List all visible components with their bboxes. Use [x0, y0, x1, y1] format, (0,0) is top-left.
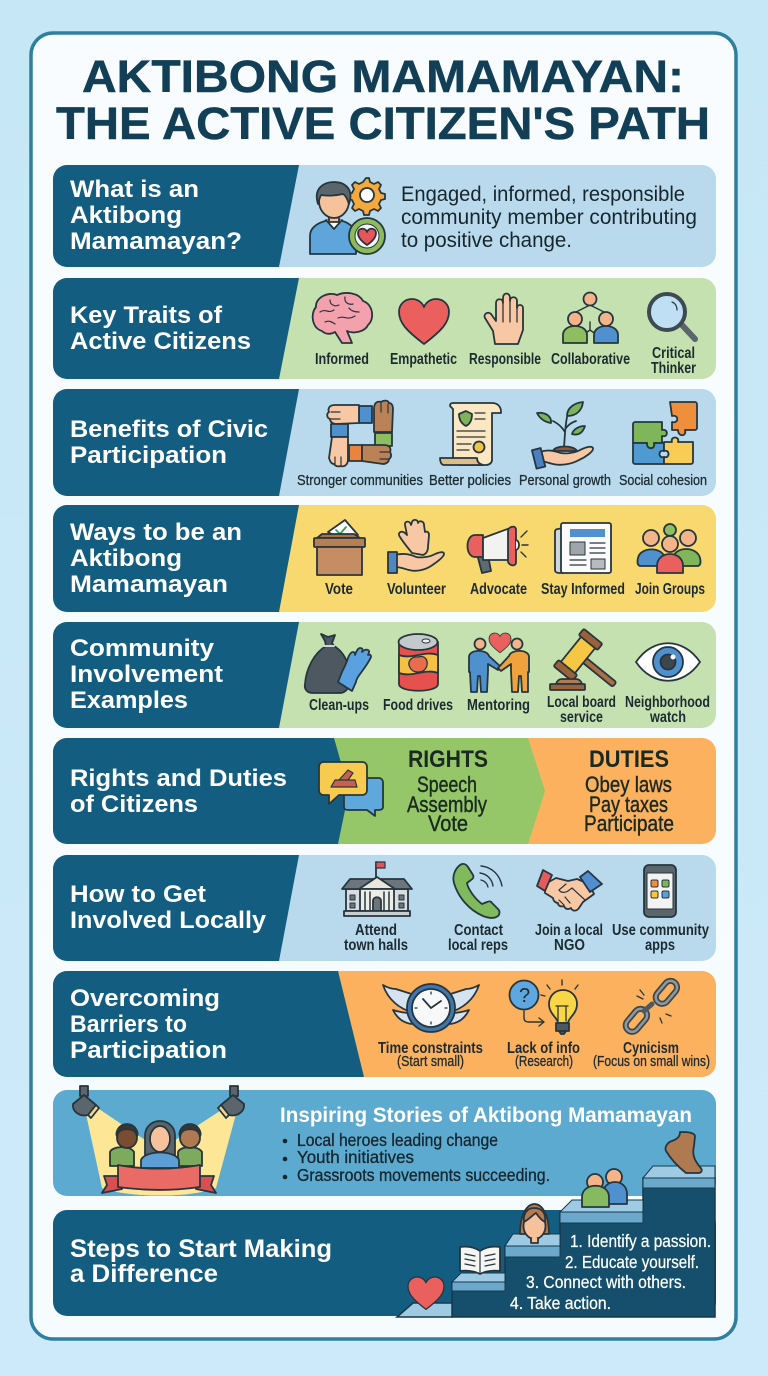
example labels: watch: [649, 709, 686, 726]
panel: overcoming barriers: [53, 971, 716, 1077]
panel: ways to be an aktibong mamamayan: [53, 505, 716, 612]
trait labels: Empathetic: [390, 351, 457, 368]
heading: community: [70, 635, 223, 714]
barrier labels: (Focus on small wins): [593, 1053, 710, 1070]
icon: group of people: [637, 524, 701, 573]
heading: benefits: [70, 416, 268, 469]
heading: what is: [70, 176, 242, 255]
barrier labels: Time constraints: [378, 1040, 483, 1057]
steps list: 4. Take action.: [510, 1293, 611, 1313]
local action labels: town halls: [344, 937, 408, 954]
panel: what is an aktibong mamamayan: [53, 165, 716, 267]
icon: question and lightbulb: [510, 980, 578, 1034]
example labels: Clean-ups: [309, 697, 369, 714]
icon: community app phone: [644, 865, 676, 917]
heading: get involved: Involved Locally: [70, 907, 267, 934]
icon: gavel: [550, 629, 630, 703]
local action labels: apps: [645, 937, 675, 954]
heading: what is: What is an: [70, 176, 199, 203]
heading: what is: Aktibong: [70, 202, 182, 229]
stories text: [280, 1104, 692, 1185]
icon: plant in hand: [532, 402, 593, 469]
staircase: [397, 1166, 715, 1317]
icon: winged clock: [383, 984, 479, 1032]
local action labels: Use community: [612, 922, 709, 939]
heading: steps line two: a Difference: [70, 1260, 218, 1288]
icon: citizen with gear and heart: [310, 178, 385, 254]
icon: linked hands: [327, 401, 393, 466]
icon: collaborative people: [563, 292, 618, 343]
trait labels: [315, 345, 696, 377]
stories text: Grassroots movements succeeding.: [297, 1165, 550, 1185]
example labels: Neighborhood: [625, 694, 710, 711]
heading: community: Examples: [70, 687, 188, 714]
panel: how to get involved: [53, 855, 716, 961]
icon: handshake: [537, 870, 602, 911]
local action labels: Attend: [355, 922, 397, 939]
icon: question and lightbulb: ?: [519, 985, 530, 1007]
title: AKTIBONG MAMAMAYAN:: [82, 51, 684, 102]
panel: inspiring stories: [53, 1086, 716, 1196]
spotlight illustration: [73, 1086, 244, 1196]
duties list: Obey laws: [585, 772, 672, 797]
icon: magnifying glass: [649, 294, 695, 339]
icon: woman on step: [520, 1204, 549, 1243]
stories text: Youth initiatives: [297, 1147, 414, 1167]
panel: rights and duties: [53, 738, 716, 844]
steps list: [510, 1231, 711, 1313]
heading: benefits: Participation: [70, 442, 227, 469]
trait labels: Responsible: [469, 351, 541, 368]
heading: ways: Ways to be an: [70, 519, 242, 546]
heading: barriers: Overcoming: [70, 985, 220, 1012]
example labels: Local board: [547, 694, 616, 711]
benefit labels: Social cohesion: [619, 472, 707, 489]
trait labels: Thinker: [651, 360, 696, 377]
icon: telephone: [453, 864, 502, 918]
stories text: Local heroes leading change: [297, 1130, 498, 1150]
local action labels: Join a local: [535, 922, 603, 939]
icon: broken chain: [623, 978, 680, 1034]
action labels: [325, 581, 705, 598]
description: [401, 182, 697, 252]
panel: community involvement: [53, 622, 716, 728]
icon: ballot box: [314, 520, 365, 575]
icon: two people on step: [582, 1169, 627, 1207]
trait labels: Critical: [652, 345, 695, 362]
duties list: [584, 746, 674, 836]
example labels: service: [560, 709, 603, 726]
icon: heart on step: [408, 1277, 444, 1309]
heading: key traits: Key Traits of: [70, 302, 223, 329]
benefit labels: Stronger communities: [297, 472, 423, 489]
benefit labels: [297, 472, 707, 489]
heading: what is: Mamamayan?: [70, 228, 242, 255]
heading: ways: [70, 519, 242, 598]
icon: brain: [313, 293, 372, 343]
barrier labels: [378, 1040, 710, 1070]
steps list: 2. Educate yourself.: [565, 1252, 699, 1272]
panel: steps to start: [53, 1132, 716, 1317]
local action labels: Contact: [454, 922, 504, 939]
trait labels: Collaborative: [551, 351, 630, 368]
duties list: DUTIES: [589, 746, 669, 773]
icon: foot stepping: [665, 1132, 702, 1173]
benefit labels: Better policies: [429, 472, 511, 489]
heading: key traits: [70, 302, 251, 355]
barrier labels: (Research): [515, 1053, 573, 1070]
rights list: [407, 746, 488, 836]
action labels: Join Groups: [635, 581, 705, 598]
title: [56, 51, 710, 149]
steps list: 1. Identify a passion.: [570, 1231, 711, 1251]
panel: benefits: [53, 389, 716, 496]
action labels: Vote: [325, 581, 353, 598]
description: to positive change.: [401, 228, 572, 252]
duties list: Participate: [584, 811, 674, 836]
heading: barriers: Participation: [70, 1037, 227, 1064]
action labels: Volunteer: [387, 581, 446, 598]
description: community member contributing: [401, 205, 697, 229]
local action labels: NGO: [554, 937, 585, 954]
example labels: [309, 694, 710, 726]
heading: rights and duties: [70, 765, 287, 818]
heading: community: Community: [70, 635, 215, 662]
barrier labels: Cynicism: [623, 1040, 679, 1057]
rights list: RIGHTS: [408, 746, 488, 773]
rights list: Vote: [428, 811, 468, 836]
duties list: Pay taxes: [589, 792, 668, 817]
stories text: Inspiring Stories of Aktibong Mamamayan: [280, 1104, 692, 1127]
heading: barriers: [70, 985, 227, 1064]
heading: barriers: Barriers to: [70, 1011, 187, 1038]
icon: puzzle pieces: [633, 402, 697, 464]
barrier labels: (Start small): [397, 1053, 464, 1070]
steps list: 3. Connect with others.: [526, 1272, 686, 1292]
action labels: Advocate: [470, 581, 527, 598]
icon: policy scroll: [440, 403, 501, 465]
description: Engaged, informed, responsible: [401, 182, 685, 206]
icon: town hall: [342, 862, 412, 916]
icon: food can: [398, 634, 438, 691]
trait labels: Informed: [315, 351, 369, 368]
action labels: Stay Informed: [541, 581, 625, 598]
icon: newspaper: [555, 523, 611, 573]
icon: volunteer hand: [388, 520, 444, 573]
heading: steps: Steps to Start Making: [70, 1235, 332, 1263]
rights list: Assembly: [407, 792, 487, 817]
benefit labels: Personal growth: [519, 472, 611, 489]
example labels: Mentoring: [467, 697, 530, 714]
title: THE ACTIVE CITIZEN'S PATH: [56, 98, 710, 149]
heading: get involved: [70, 881, 267, 934]
icon: heart: [399, 299, 449, 344]
heading: community: Involvement: [70, 661, 223, 688]
barrier labels: Lack of info: [507, 1040, 580, 1057]
heading: ways: Aktibong: [70, 545, 182, 572]
icon: raised hand: [485, 294, 523, 344]
heading: key traits: Active Citizens: [70, 328, 251, 355]
heading: benefits: Benefits of Civic: [70, 416, 268, 443]
example labels: Food drives: [383, 697, 453, 714]
heading: rights and duties: Rights and Duties: [70, 765, 287, 792]
heading: rights and duties: of Citizens: [70, 791, 198, 818]
local action labels: local reps: [448, 937, 508, 954]
icon: trash bag and glove: [305, 634, 371, 693]
icon: speech bubbles: [319, 762, 383, 816]
icon: megaphone: [468, 527, 528, 573]
icon: eye: [636, 643, 700, 681]
heading: get involved: How to Get: [70, 881, 206, 908]
rights list: Speech: [417, 772, 477, 797]
icon: open book: [460, 1247, 500, 1274]
local action labels: [344, 922, 709, 954]
icon: mentoring: [469, 633, 529, 692]
panel: key traits: [53, 278, 716, 379]
heading: ways: Mamamayan: [70, 571, 228, 598]
